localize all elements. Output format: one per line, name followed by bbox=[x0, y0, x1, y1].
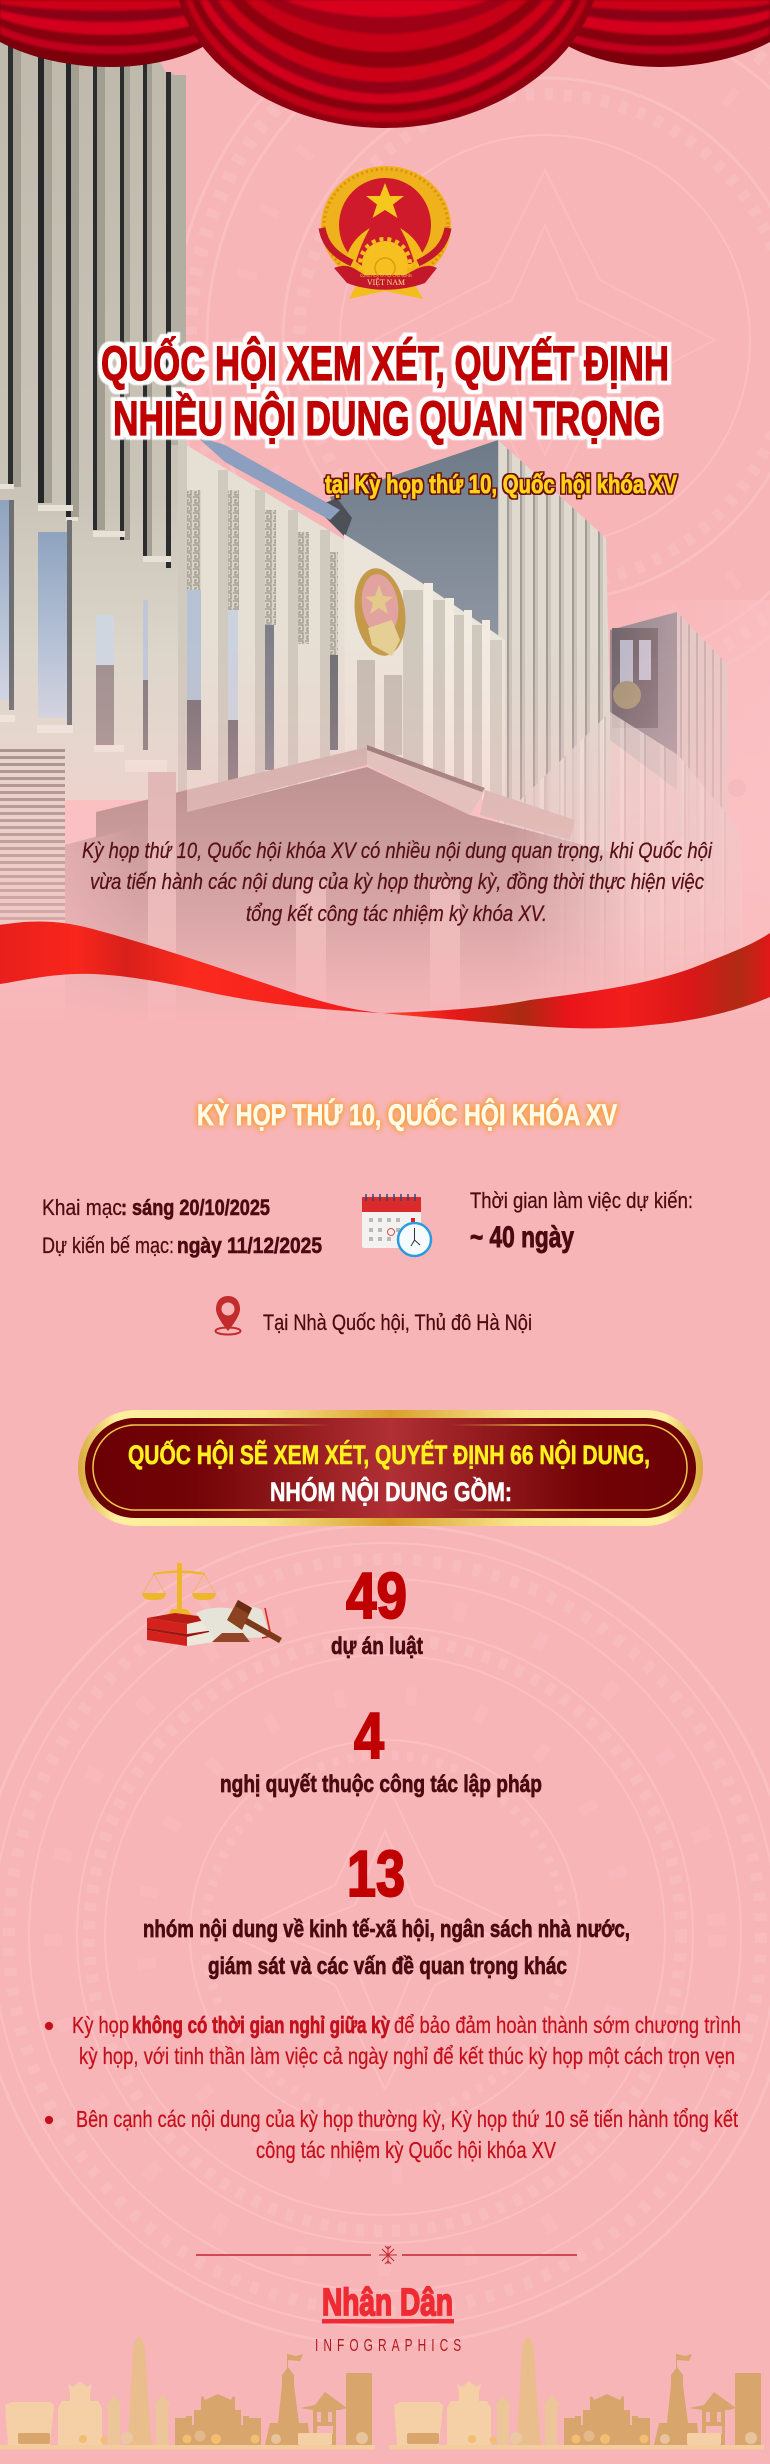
opening label: Khai mạc bbox=[42, 1195, 122, 1220]
closing label: Dự kiến bế mạc: bbox=[42, 1233, 174, 1258]
scale strings bbox=[143, 1574, 215, 1593]
skyline right bbox=[389, 2337, 764, 2450]
lower columns bbox=[148, 772, 460, 1032]
entrance canopy bbox=[65, 745, 640, 1030]
banner text line 2: NHÓM NỘI DUNG GỒM: bbox=[270, 1476, 512, 1507]
label: dự án luật bbox=[331, 1633, 423, 1660]
cogwheel bbox=[362, 241, 408, 287]
lattice screen bbox=[0, 745, 65, 925]
closing date: ngày 11/12/2025 bbox=[177, 1233, 322, 1258]
vehicles bbox=[18, 2433, 50, 2444]
divider with ornament bbox=[196, 2246, 577, 2264]
facade windows bbox=[0, 500, 338, 780]
right swag bbox=[560, 0, 770, 70]
icon: calendar and clock bbox=[362, 1194, 431, 1256]
trees bbox=[79, 2430, 368, 2444]
banner text VIỆT NAM: VIỆT NAM bbox=[367, 277, 405, 287]
gavel base bbox=[212, 1633, 250, 1642]
left swag bbox=[0, 0, 210, 70]
banner red field bbox=[85, 1418, 696, 1518]
wing pilasters bbox=[403, 583, 502, 805]
base bbox=[349, 278, 423, 299]
bullet 2 bbox=[45, 2106, 738, 2163]
stat: 13 bbox=[143, 1837, 630, 1980]
scroll banner bbox=[334, 266, 437, 290]
decorative maze panels bbox=[187, 490, 338, 655]
label line 1: nhóm nội dung về kinh tế-xã hội, ngân sách nhà nước, bbox=[143, 1916, 630, 1943]
session dates bbox=[42, 1195, 322, 1258]
scale bbox=[142, 1563, 216, 1615]
grey rear block bbox=[330, 440, 498, 640]
subtitle: tại Kỳ họp thứ 10, Quốc hội khóa XV bbox=[325, 469, 678, 499]
gold wreath bbox=[321, 166, 451, 286]
emblem wall bbox=[344, 534, 505, 800]
pink haze bbox=[0, 640, 770, 1040]
working time label: Thời gian làm việc dự kiến: bbox=[470, 1188, 693, 1213]
distant tree bbox=[728, 779, 746, 797]
location text: Tại Nhà Quốc hội, Thủ đô Hà Nội bbox=[263, 1310, 532, 1335]
ribbon right part bbox=[382, 933, 770, 1028]
logo underline bbox=[322, 2319, 454, 2324]
emblem on building bbox=[349, 565, 411, 659]
light buildings bbox=[5, 2381, 102, 2445]
stat: 4 bbox=[220, 1699, 542, 1798]
intro paragraph bbox=[82, 838, 713, 926]
centre swag bbox=[175, 0, 600, 130]
working time bbox=[470, 1188, 693, 1254]
striped rear block bbox=[498, 440, 610, 880]
pagoda openings bbox=[317, 2412, 321, 2422]
bullet 1 bbox=[45, 2012, 741, 2069]
ribbon left part bbox=[0, 921, 382, 1013]
working time value: ~ 40 ngày bbox=[470, 1221, 574, 1254]
lower right wing bbox=[500, 712, 745, 1020]
closed books bbox=[147, 1613, 213, 1624]
spires and obelisk bbox=[106, 2337, 171, 2445]
ribbon bbox=[0, 921, 770, 1028]
title bbox=[101, 336, 669, 446]
decorative bottom bronze drum pattern bbox=[0, 1525, 770, 2345]
stat: 4: 4 bbox=[354, 1699, 384, 1772]
stat: 13: 13 bbox=[347, 1837, 405, 1910]
intro line 3: tổng kết công tác nhiệm kỳ khóa XV. bbox=[246, 901, 547, 926]
curtain bbox=[0, 0, 770, 130]
left tower bbox=[0, 40, 345, 800]
decorative top bronze drum pattern bbox=[173, 0, 770, 712]
tower shaded sides and dark slits bbox=[8, 40, 186, 568]
red field bbox=[339, 178, 431, 272]
stat: 49 bbox=[331, 1559, 423, 1660]
background glow bbox=[0, 620, 770, 1040]
section heading: KỲ HỌP THỨ 10, QUỐC HỘI KHÓA XV bbox=[197, 1098, 617, 1132]
banner gold frame bbox=[78, 1410, 703, 1526]
building photo bbox=[0, 40, 770, 1040]
blue glass roof strip bbox=[196, 436, 340, 520]
logo: Nhân Dân: Nhân Dân bbox=[322, 2282, 453, 2324]
label line 2: giám sát và các vấn đề quan trọng khác bbox=[208, 1953, 567, 1980]
gavel bbox=[227, 1600, 282, 1643]
lower ledges bbox=[0, 715, 167, 772]
bullet 1 start: Kỳ họp bbox=[72, 2012, 129, 2038]
banner inner line bbox=[93, 1425, 687, 1510]
icon: location pin bbox=[216, 1296, 240, 1334]
tower window ledges bbox=[0, 484, 171, 562]
wall recess windows bbox=[357, 660, 402, 755]
dark roof piece bbox=[315, 498, 352, 537]
bullet 1 bold: không có thời gian nghỉ giữa kỳ bbox=[132, 2012, 390, 2038]
cream lower facade bbox=[178, 440, 345, 800]
logo sub text: INFOGRAPHICS bbox=[315, 2336, 461, 2356]
star bbox=[366, 183, 404, 218]
state emblem bbox=[321, 166, 451, 299]
right side haze bbox=[600, 600, 770, 1040]
icon: scales, books and gavel bbox=[142, 1563, 282, 1646]
bullet 2 line 2: công tác nhiệm kỳ Quốc hội khóa XV bbox=[256, 2137, 557, 2163]
palace and tower group bbox=[175, 2354, 372, 2445]
ground bbox=[0, 2445, 375, 2450]
side ribbons bbox=[322, 228, 448, 263]
banner bbox=[78, 1410, 703, 1526]
banner text small: CỘNG HÒA XÃ HỘI CHỦ NGHĨA bbox=[360, 272, 412, 278]
skyline left bbox=[0, 2337, 375, 2450]
rice sheaves bbox=[345, 228, 425, 268]
stat: 49: 49 bbox=[346, 1559, 407, 1632]
opening date: : sáng 20/10/2025 bbox=[121, 1195, 270, 1220]
facade column shading bbox=[178, 440, 330, 800]
label: nghị quyết thuộc công tác lập pháp bbox=[220, 1771, 542, 1798]
third block with windows bbox=[610, 612, 728, 930]
open book bbox=[196, 1606, 270, 1640]
